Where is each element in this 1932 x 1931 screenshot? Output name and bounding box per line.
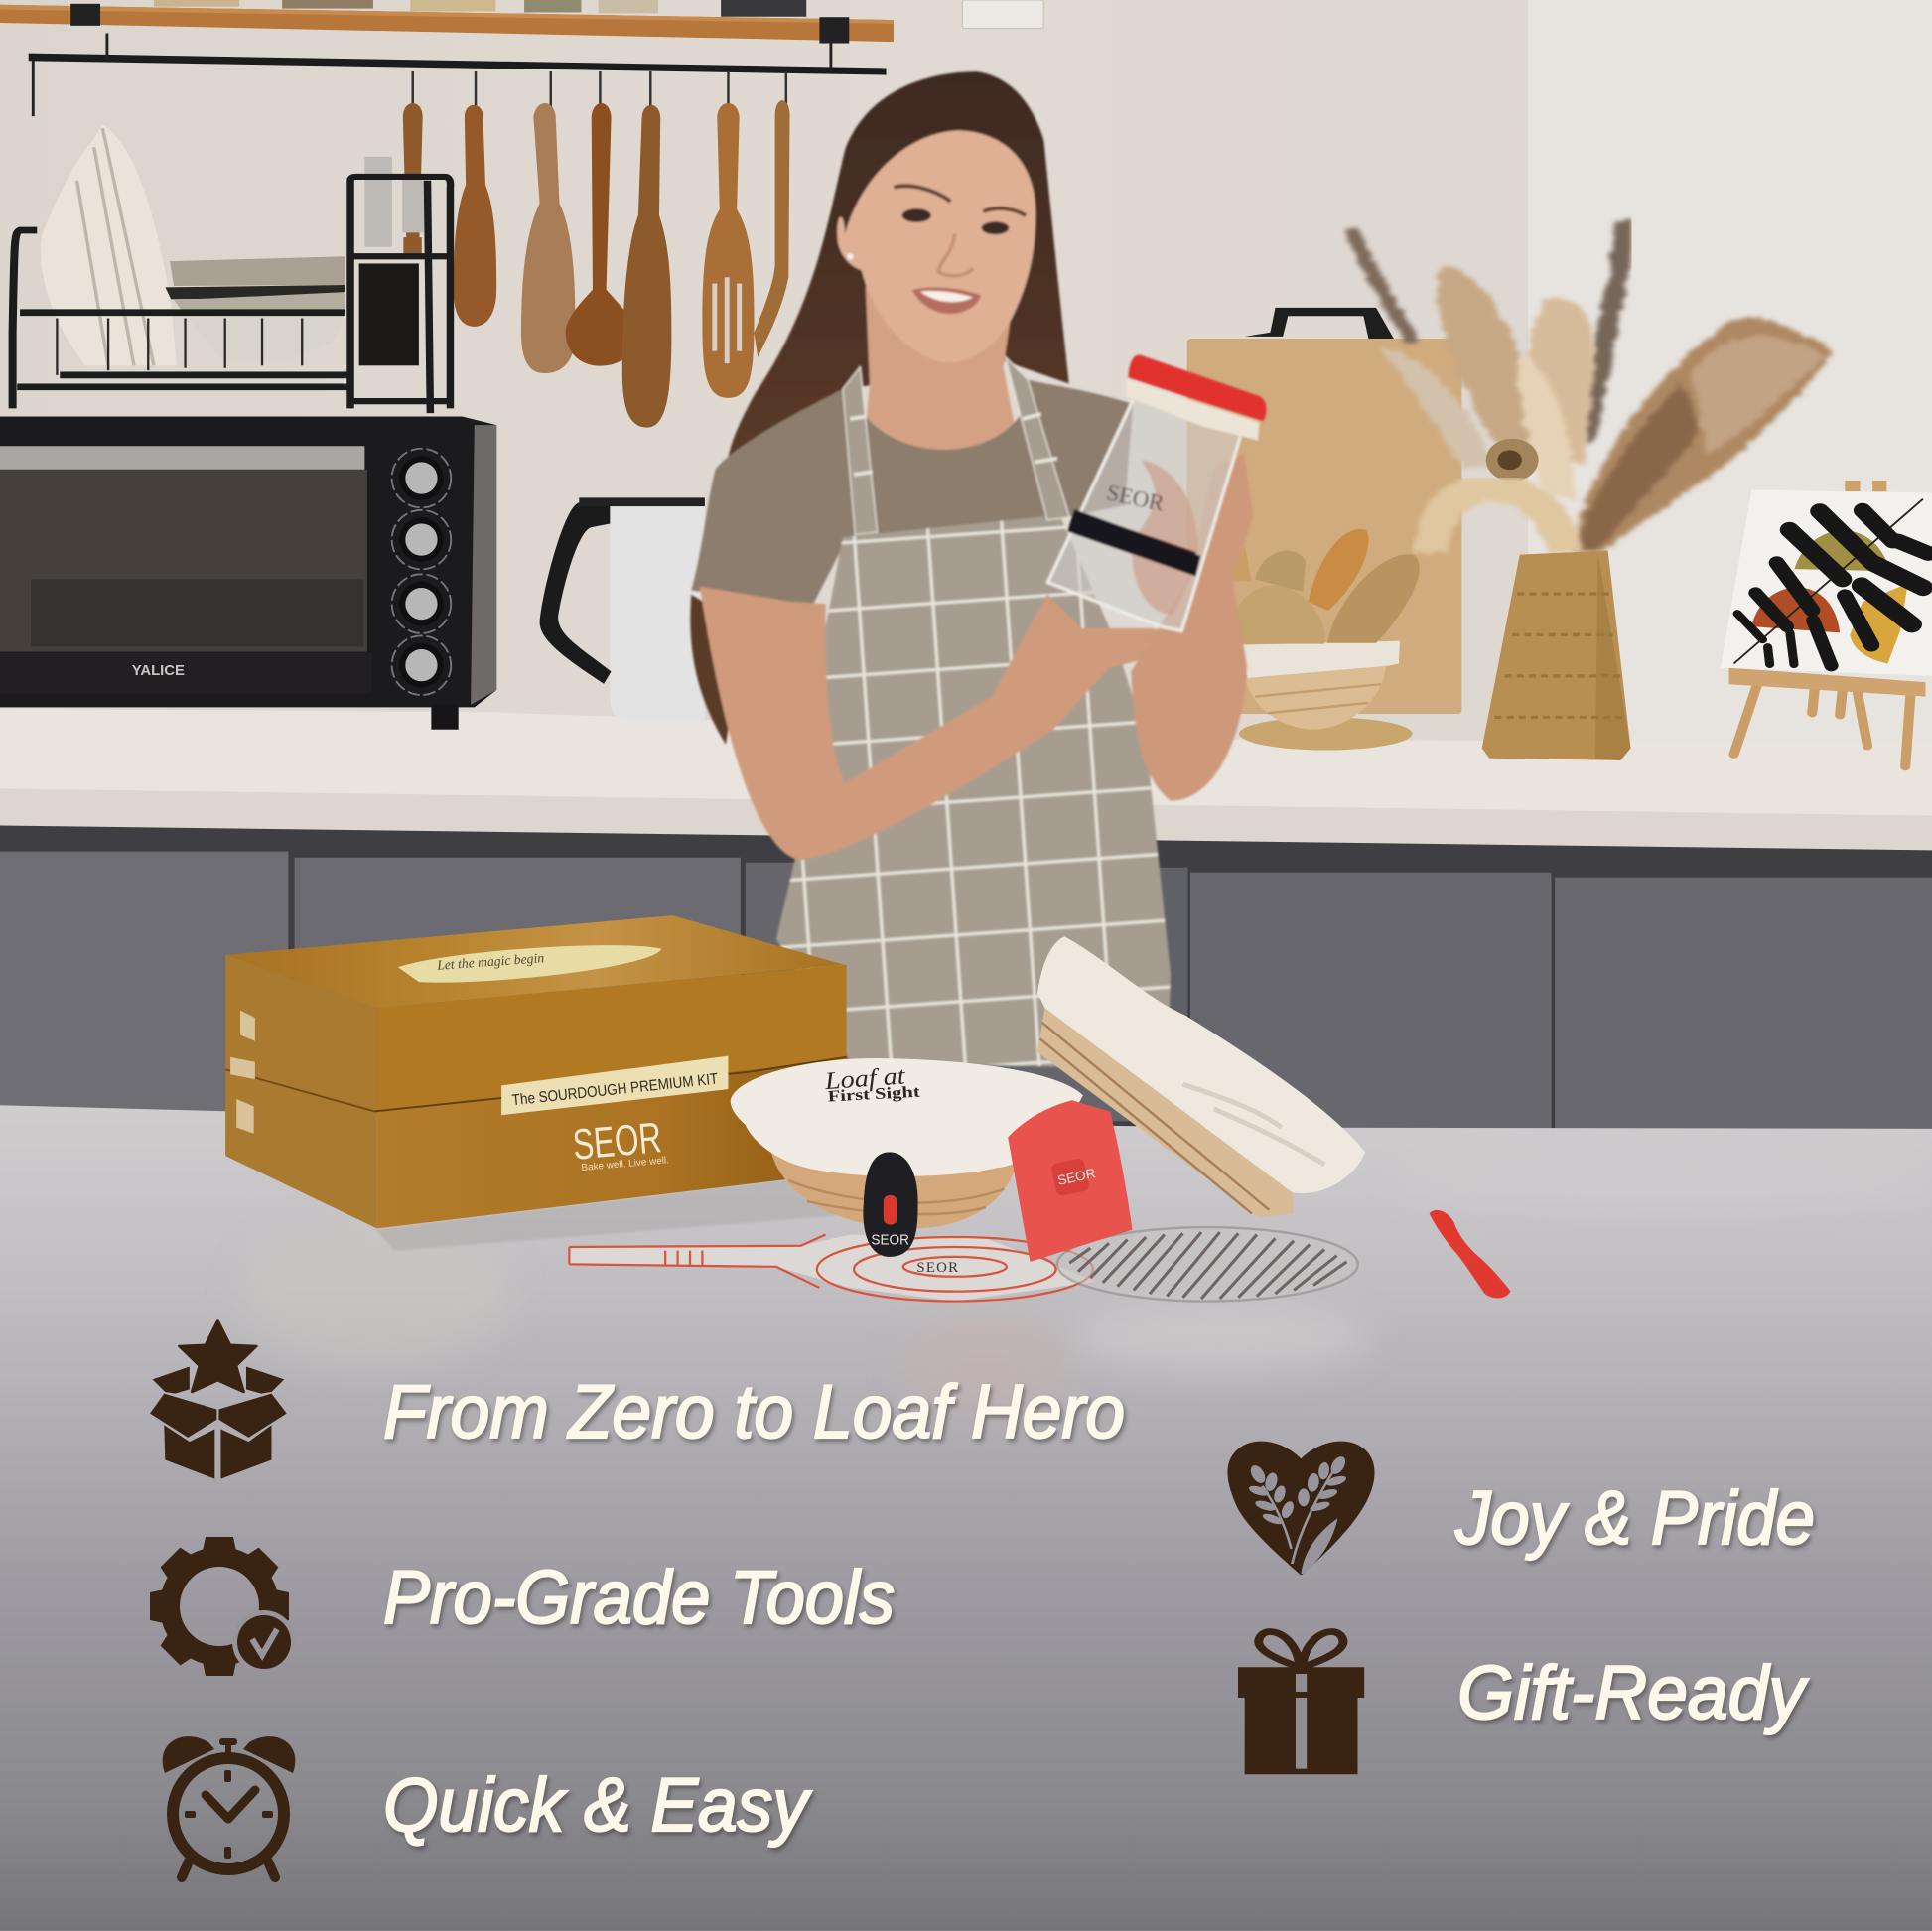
benefit icon: alarm clock [163, 1736, 295, 1877]
red silicone spatula [1430, 1210, 1511, 1299]
box top label [398, 945, 661, 983]
silicone pastry mat [569, 1235, 1097, 1302]
benefit icon: box with star [150, 1321, 287, 1479]
kit gift box: Let the magic begin [436, 950, 545, 973]
benefit: Pro-Grade Tools: Pro-Grade Tools [383, 1556, 895, 1640]
counter front edge [0, 788, 1932, 853]
electric kettle [540, 497, 705, 721]
benefit icon: heart with wheat [1227, 1442, 1375, 1576]
box side printed panel [230, 1011, 255, 1134]
benefit: Joy & Pride: Joy & Pride [1454, 1476, 1815, 1561]
benefit: Gift-Ready: Gift-Ready [1457, 1651, 1809, 1735]
toaster oven [0, 416, 496, 730]
kitchen shelf and rail [0, 0, 894, 116]
back counter [0, 709, 1932, 853]
benefit: From Zero to Loaf Hero: From Zero to Loaf Hero [383, 1370, 1125, 1454]
hanging wooden utensils [403, 71, 790, 428]
woman holding jar [690, 71, 1267, 1069]
red dough scraper [1008, 1100, 1133, 1262]
glass starter jar [1048, 355, 1267, 630]
lower cabinets [0, 826, 1932, 1140]
apron straps [843, 357, 1069, 535]
bread basket [1227, 529, 1420, 751]
right-side decor: board, bread, pampas, vase, canvas [1187, 219, 1932, 766]
wall [0, 0, 1932, 763]
apron [776, 515, 1171, 1069]
oblong proofing basket with cloth [1037, 936, 1365, 1217]
box front label [501, 1056, 728, 1115]
toaster oven: YALICE [132, 663, 185, 679]
right wall column [1528, 0, 1932, 763]
bread lame [863, 1152, 918, 1257]
viewer-right arm and hand [1131, 454, 1253, 801]
red dough scraper: SEOR [1056, 1166, 1097, 1188]
marble work surface [0, 1105, 1932, 1931]
cutting board [1187, 308, 1461, 714]
bread lame: SEOR [871, 1232, 909, 1248]
power outlet [962, 0, 1043, 29]
shirt, neck and face [691, 130, 1133, 605]
wicker vase [1482, 550, 1630, 760]
viewer-left arm and hand [700, 587, 1179, 860]
hair [690, 71, 1069, 745]
box logo: SEOR [571, 1114, 663, 1170]
round proofing basket with cloth: Loaf at [823, 1062, 907, 1095]
kit gift box: The SOURDOUGH PREMIUM KIT [511, 1070, 720, 1109]
benefit icon: gear with check [150, 1537, 296, 1676]
kit gift box [225, 915, 847, 1228]
glass starter jar: SEOR [1104, 480, 1167, 516]
kit gift box: Bake well. Live well. [581, 1155, 669, 1173]
benefit icon: gift box [1238, 1632, 1364, 1774]
cooling rack [1057, 1227, 1358, 1302]
dried pampas arrangement [1351, 219, 1833, 553]
round proofing basket with cloth [731, 1058, 1083, 1228]
easel [1728, 481, 1925, 766]
silicone pastry mat: SEOR [916, 1260, 959, 1276]
facial features [847, 186, 1026, 314]
shadow beneath kit box [376, 1179, 863, 1251]
canvas painting [1721, 490, 1932, 676]
benefit: Quick & Easy: Quick & Easy [383, 1763, 812, 1848]
dish rack with plates and bowls [13, 124, 451, 413]
round proofing basket with cloth: First Sight [827, 1084, 921, 1106]
marble reflections [240, 1166, 1932, 1417]
